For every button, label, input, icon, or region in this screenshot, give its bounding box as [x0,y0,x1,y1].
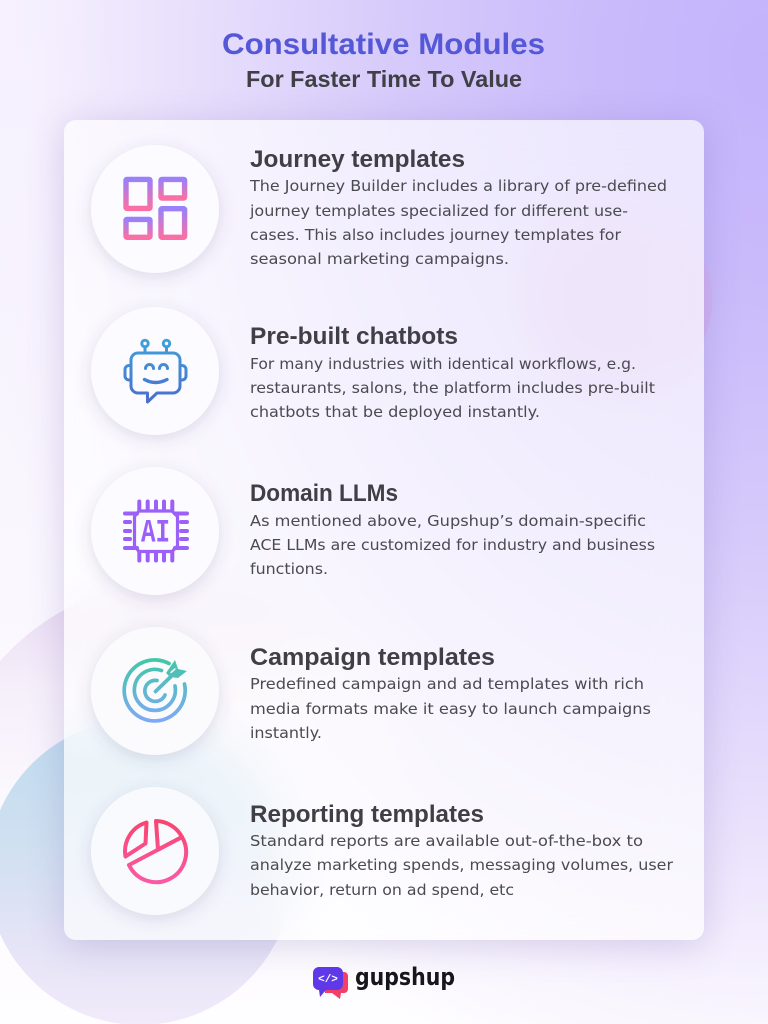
block: pre-built chatbots: restaurants, salons, the platform includes pre-built [250,379,655,397]
block: campaign templates: Campaign templates [250,644,495,671]
icon: pie chart [91,787,219,915]
block: journey templates: The Journey Builder includes a library of pre-defined [249,177,667,195]
block: journey templates: seasonal marketing campaigns. [250,250,509,268]
block: domain LLMs [250,480,655,578]
block: reporting templates: analyze marketing spends, messaging volumes, user [250,856,674,874]
block: campaign templates: media formats make it easy to launch campaigns [250,700,651,718]
decorative circle: pink left [0,580,420,1024]
decorative circle: blue left [0,719,293,1024]
block: domain LLMs: Domain LLMs [250,480,398,507]
panel: card [64,120,704,940]
block: reporting templates: Standard reports are available out-of-the-box to [250,832,643,850]
block: pre-built chatbots [250,323,655,421]
block: campaign templates: Predefined campaign and ad templates with rich [250,675,644,693]
block: reporting templates: Reporting templates [250,801,484,828]
block: journey templates: Journey templates [250,146,465,173]
subtitle: For Faster Time To Value [246,66,522,92]
icon: target [91,627,219,755]
block: journey templates [249,146,667,268]
logo: gupshup: </> [318,974,338,986]
logo: gupshup: gupshup [355,963,455,991]
block: reporting templates [250,801,674,899]
block: domain LLMs: As mentioned above, Gupshup’s domain-specific [250,512,646,530]
block: reporting templates: behavior, return on ad spend, etc [250,881,514,899]
block: pre-built chatbots: chatbots that be deployed instantly. [250,403,540,421]
title: Consultative Modules [222,28,545,61]
block: journey templates: cases. This also includes journey templates for [250,226,622,244]
icon: journey templates grid [91,145,219,273]
block: campaign templates: instantly. [250,724,322,742]
logo: gupshup [313,963,455,999]
block: domain LLMs: ACE LLMs are customized for industry and business [250,536,655,554]
decorative circle: lilac right [522,205,712,395]
icon: chatbot [91,307,219,435]
icon: AI chip: AI [141,514,170,552]
block: domain LLMs: functions. [250,560,328,578]
block: journey templates: journey templates specialized for different use- [249,202,628,220]
block: campaign templates [250,644,651,742]
block: pre-built chatbots: Pre-built chatbots [250,323,458,350]
block: pre-built chatbots: For many industries with identical workflows, e.g. [250,355,636,373]
icon: AI chip [91,467,219,595]
